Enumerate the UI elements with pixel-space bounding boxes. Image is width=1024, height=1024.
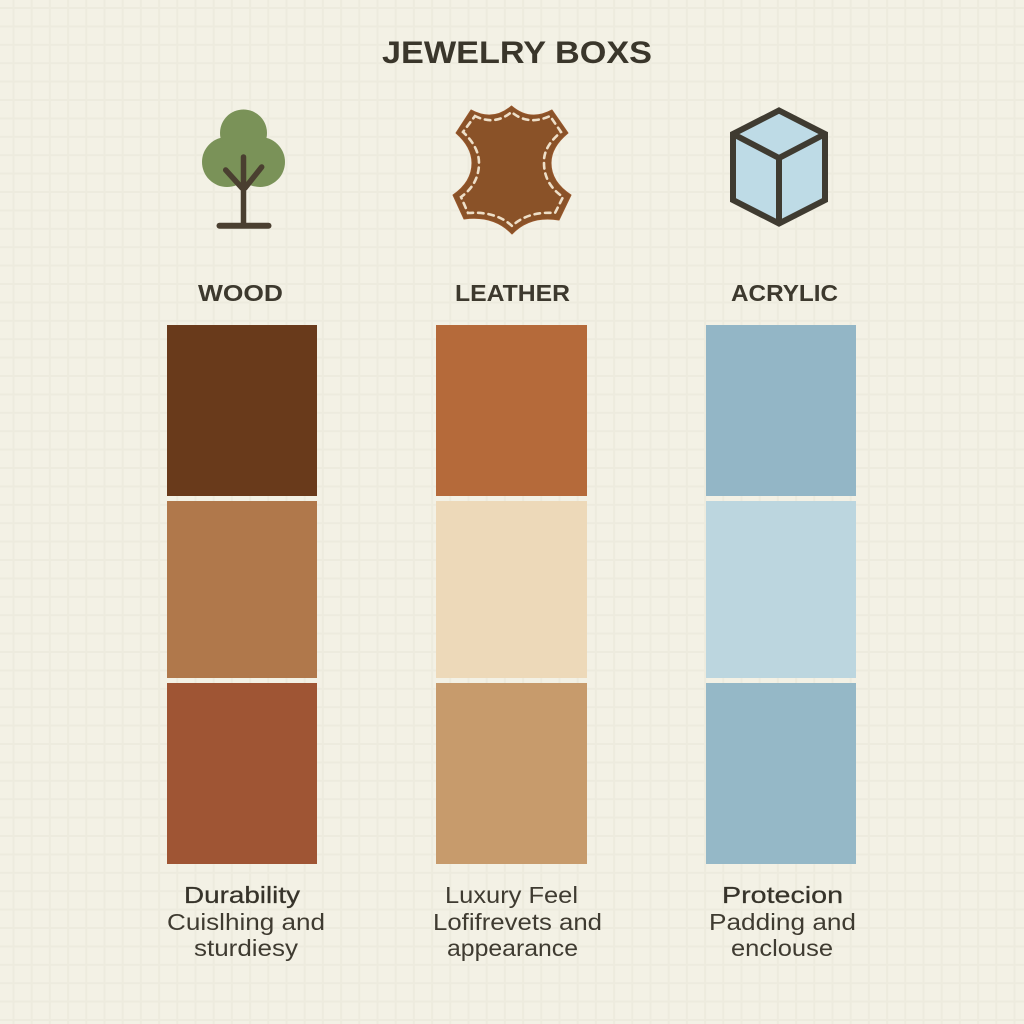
text: durability: Durability <box>184 882 301 908</box>
swatch: reddish wood <box>167 683 317 864</box>
panel: acrylic <box>706 110 856 961</box>
text: protection: enclouse <box>731 935 833 961</box>
swatch: cream leather <box>436 501 587 678</box>
text: luxury feel: Luxury Feel <box>445 882 578 908</box>
panel: leather <box>433 106 602 961</box>
icon: tree <box>202 110 285 226</box>
swatch: dark wood <box>167 325 317 496</box>
icon: acrylic cube <box>733 110 825 224</box>
text: durability: Cuislhing and <box>167 909 325 935</box>
text: luxury feel <box>433 882 602 961</box>
panel: wood <box>167 110 325 961</box>
heading: acrylic: ACRYLIC <box>731 280 838 306</box>
swatch: medium wood <box>167 501 317 678</box>
swatch: tan leather <box>436 325 587 496</box>
swatch: sand leather <box>436 683 587 864</box>
swatch: bottom acrylic <box>706 683 856 864</box>
swatch: pale acrylic <box>706 501 856 678</box>
title: JEWELRY BOXS <box>382 34 652 70</box>
text: luxury feel: appearance <box>447 935 578 961</box>
text: protection <box>709 882 856 961</box>
heading: leather: LEATHER <box>455 280 570 306</box>
icon: leather hide <box>453 106 571 234</box>
heading: wood: WOOD <box>198 280 283 306</box>
text: durability: sturdiesy <box>194 935 299 961</box>
text: protection: Protecion <box>722 882 843 908</box>
text: protection: Padding and <box>709 909 856 935</box>
swatch: top acrylic <box>706 325 856 496</box>
text: luxury feel: Lofifrevets and <box>433 909 602 935</box>
text: durability <box>167 882 325 961</box>
